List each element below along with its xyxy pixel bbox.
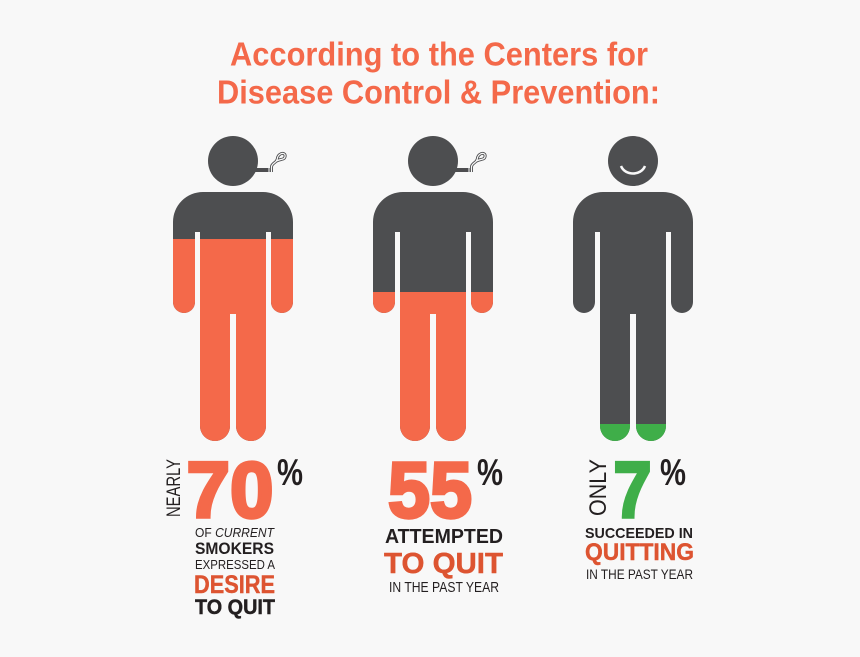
description: DESIRE	[194, 571, 275, 599]
description: EXPRESSED A	[195, 557, 275, 572]
number: 70: 70	[186, 445, 274, 534]
body silhouette	[573, 192, 693, 441]
percent sign: %	[477, 452, 503, 493]
description	[384, 526, 503, 596]
number: 55: 55	[388, 445, 472, 534]
figure: person 1, 70 percent desire to quit	[173, 136, 293, 441]
number: 7: 7	[614, 445, 652, 534]
stat block: nearly 70 percent	[164, 445, 303, 619]
description: SUCCEEDED IN	[585, 525, 693, 542]
description: IN THE PAST YEAR	[586, 566, 693, 582]
stat block: 55 percent	[384, 445, 503, 596]
label: only: ONLY	[585, 459, 612, 516]
title: According to the Centers for	[230, 36, 648, 72]
figure: person 2, 55 percent attempted to quit	[373, 136, 493, 441]
description: TO QUIT	[384, 548, 503, 580]
title	[217, 36, 660, 110]
stat block: only 7 percent	[585, 445, 694, 582]
description: OF CURRENT	[195, 525, 275, 540]
description: QUITTING	[585, 539, 694, 566]
percent sign: %	[277, 452, 303, 493]
title: Disease Control & Prevention:	[217, 74, 660, 110]
description	[194, 525, 275, 619]
description: TO QUIT	[195, 596, 275, 619]
icon: head with cigarette	[208, 136, 285, 186]
icon: head with cigarette	[408, 136, 485, 186]
description: SMOKERS	[195, 540, 274, 558]
description: IN THE PAST YEAR	[389, 580, 499, 596]
figure: person 3, 7 percent succeeded	[573, 136, 693, 441]
body silhouette	[373, 192, 493, 441]
body silhouette	[173, 192, 293, 441]
label: nearly: NEARLY	[164, 459, 185, 517]
percent sign: %	[660, 452, 686, 493]
icon: smiling head	[608, 136, 658, 186]
description: ATTEMPTED	[385, 526, 503, 548]
description	[585, 525, 694, 582]
